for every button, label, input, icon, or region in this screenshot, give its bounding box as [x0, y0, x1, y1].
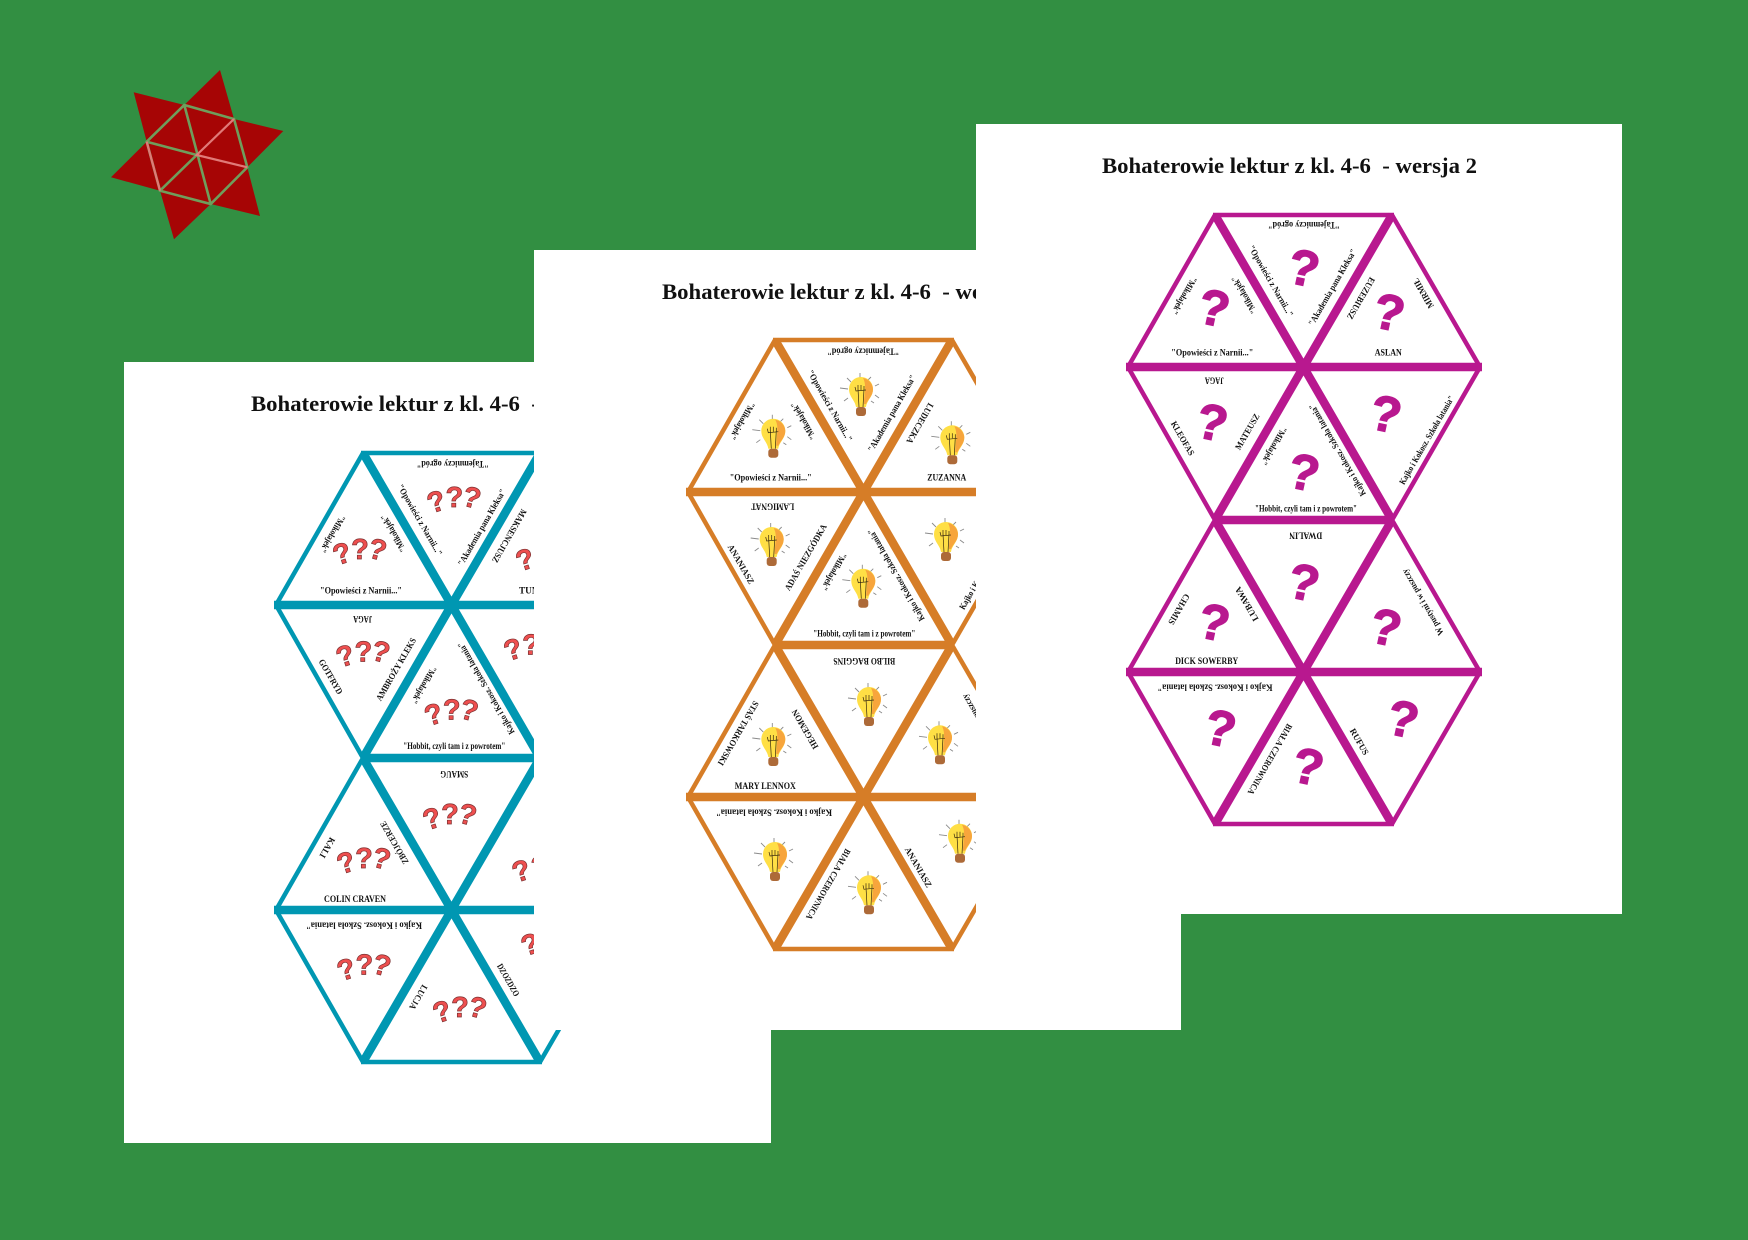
icons: triple question marks: ? — [351, 534, 369, 566]
triangle labels: "Opowieści z Narnii..." — [730, 473, 812, 483]
puzzle: teal — [251, 391, 630, 1062]
icons: triple question marks: ? — [517, 927, 544, 963]
triangle labels: "Hobbit, czyli tam i z powrotem" — [1255, 503, 1357, 513]
icons: magenta question marks: ? — [1193, 592, 1235, 653]
icons: magenta question marks: ? — [1191, 392, 1233, 453]
icons: triple question marks: ? — [368, 635, 393, 670]
triangle labels: DWALIN — [1289, 531, 1322, 541]
triangle labels: BIAŁA CZEROWNICA — [1245, 722, 1294, 797]
icons: triple question marks: ? — [548, 539, 573, 574]
triangle labels: AMBROŻY KLEKS — [374, 636, 418, 703]
icons: triple question marks: ? — [369, 842, 394, 877]
triangle labels: ASLAN — [1375, 347, 1402, 357]
icons: triple question marks: ? — [508, 854, 535, 890]
triangle labels: "Mikołajek" — [1259, 425, 1289, 467]
icons: magenta question marks: ? — [1200, 698, 1241, 759]
triangle labels: "Mikołajek" — [318, 513, 348, 555]
puzzle: orange — [662, 279, 1042, 949]
icons: triple question marks: ? — [329, 536, 356, 572]
panel: sheet version 2 with magenta question marks — [976, 124, 1622, 914]
triangle labels: KALI — [317, 836, 337, 860]
heading: Bohaterowie lektur z kl. 4-6 - wersja 3 — [662, 279, 1037, 304]
triangle labels: BILBO BAGGINS — [833, 656, 895, 666]
icons: triple question marks: ? — [553, 923, 578, 959]
triangle labels: COLIN CRAVEN — [324, 894, 386, 904]
triangle labels — [715, 347, 1016, 922]
triangle labels: Kajko i Kokosz. Szkoła latania" — [1158, 683, 1272, 693]
icons: triple question marks: ? — [365, 533, 390, 568]
icons: triple question marks: ? — [522, 630, 540, 662]
sheet background — [124, 362, 771, 1143]
icons: triple question marks: ? — [369, 948, 394, 984]
triangle labels: DICK SOWERBY — [1175, 656, 1239, 666]
triangle labels: LUDECZKA — [904, 401, 936, 446]
triangle labels — [306, 459, 559, 1012]
icons: magenta question marks: ? — [1365, 597, 1407, 658]
icons: triple question marks: ? — [354, 636, 372, 668]
triangle labels: Kajko i Kokosz. Szkoła latania" — [957, 519, 1016, 611]
icons: triple question marks: ? — [459, 481, 484, 516]
triangle labels: "Mikołajek" — [1169, 275, 1199, 316]
triangle labels: W pustyni i w puszczy — [959, 692, 1006, 762]
triangle labels: Kajko i Kokosz. Szkoła latania" — [455, 640, 517, 736]
icons: triple question marks: ? — [455, 798, 480, 833]
icons: triple question marks: ? — [419, 801, 446, 837]
heading: Bohaterowie lektur z kl. 4-6 - wersja 2 — [1102, 153, 1477, 178]
icons: triple question marks: ? — [530, 851, 548, 883]
icons: triple question marks: ? — [441, 799, 459, 831]
icons: triple question marks: ? — [536, 628, 561, 664]
panel: sheet version with question marks (teal) — [124, 362, 771, 1143]
triangle labels: LUCJA — [407, 983, 429, 1012]
triangle grid — [274, 453, 630, 1062]
triangle labels: SMAUG — [440, 769, 468, 779]
triangle labels: "Opowieści z Narnii..." — [395, 482, 445, 558]
triangle labels: "Opowieści z Narnii..." — [1246, 243, 1296, 319]
triangle labels: "Akademia pana Kleksa" — [866, 373, 918, 453]
triangle labels: Kajko i Kokosz. Szkoła latania" — [306, 921, 422, 931]
icons: triple question marks: ? — [451, 992, 469, 1024]
icons: triple question marks: ? — [445, 482, 463, 514]
icons: triple question marks: ? — [456, 693, 482, 729]
icons: magenta question marks: ? — [1287, 736, 1329, 798]
triangle labels: Kajko i Kokosz. Szkoła latania" — [716, 808, 832, 818]
icons: magenta question marks — [1191, 238, 1424, 798]
triangle labels: "Opowieści z Narnii..." — [1171, 347, 1253, 357]
triangle labels: ADAŚ NIEZGÓDKA — [783, 522, 829, 592]
heading: Bohaterowie lektur z kl. 4-6 - wersja 1 — [251, 391, 626, 416]
triangle labels: "Akademia pana Kleksa" — [456, 487, 508, 567]
triangle labels: CHAMIS — [1166, 592, 1192, 627]
triangle labels: ZBÓJCERZE — [378, 819, 411, 866]
icons: triple question marks: ? — [355, 843, 373, 875]
triangle labels: LUBAWA — [1233, 585, 1261, 623]
icons: triple question marks: ? — [332, 639, 359, 675]
triangle labels: "Mikołajek" — [727, 400, 757, 442]
icons: triple question marks: ? — [544, 850, 569, 885]
triangle grid — [1126, 215, 1482, 824]
triangle labels: "Mikołajek" — [1229, 274, 1259, 316]
sheet background — [534, 250, 1181, 1030]
triangle labels: "Hobbit, czyli tam i z powrotem" — [403, 741, 505, 751]
triangle labels: "Mikołajek" — [409, 664, 439, 706]
triangle labels: DZOZDZO — [495, 962, 522, 998]
triangle labels: "Akademia pana Kleksa" — [1306, 247, 1358, 327]
triangle labels: "Tajemniczy ogród" — [417, 459, 489, 469]
triangle labels: Kajko i Kokosz. Szkoła latania" — [1397, 394, 1456, 486]
triangle labels: STAŚ TARKOWSKI — [715, 699, 761, 768]
icons: magenta question marks: ? — [1368, 282, 1410, 343]
triangle labels: Kajko i Kokosz. Szkoła latania" — [865, 527, 927, 623]
puzzle: magenta — [1102, 153, 1482, 824]
triangle labels: ANANIASZ — [726, 543, 756, 586]
icons: triple question marks: ? — [539, 925, 557, 957]
triangle labels: "Mikołajek" — [378, 513, 408, 554]
panel: sheet version with light bulbs (orange) — [534, 250, 1181, 1030]
icons: magenta question marks: ? — [1193, 278, 1235, 339]
triangle labels — [1158, 220, 1456, 797]
icons: triple question marks: ? — [355, 950, 373, 982]
icons: magenta question marks: ? — [1382, 689, 1424, 750]
icons: triple question marks: ? — [443, 695, 461, 727]
icons: magenta question marks: ? — [1283, 552, 1325, 613]
triangle labels: MAKSENCJUSZ — [490, 508, 529, 564]
icons: triple question marks: ? — [429, 994, 456, 1030]
triangle labels: W pustyni i w puszczy — [1399, 567, 1446, 637]
triangle labels: KLEOFAS — [1169, 419, 1197, 457]
icons: triple question marks: ? — [333, 952, 360, 988]
triangle labels: HEGEMON — [789, 707, 820, 751]
triangle labels: ZUZANNA — [927, 473, 967, 483]
sheet background — [976, 124, 1622, 914]
icons: triple question marks: ? — [421, 697, 447, 733]
icons: magenta question marks: ? — [1365, 384, 1407, 445]
icon: red star of triangles — [111, 70, 283, 239]
icons: magenta question marks: ? — [1283, 238, 1325, 299]
icons: triple question marks: ? — [534, 540, 552, 572]
triangle labels: GOTFRYD — [317, 657, 345, 696]
triangle labels: BIAŁA CZEROWNICA — [804, 847, 853, 922]
triangle labels: MARY LENNOX — [735, 781, 796, 791]
triangle labels: "Mikołajek" — [819, 551, 849, 592]
triangle labels: RUFUS — [1348, 727, 1371, 757]
icons: triple question marks: ? — [333, 845, 360, 881]
triangle labels: "Hobbit, czyli tam i z powrotem" — [813, 628, 915, 638]
triangle labels: MATEUSZ — [1233, 412, 1262, 452]
triangle labels: "Opowieści z Narnii..." — [805, 368, 855, 443]
triangle labels: "Tajemniczy ogród" — [827, 347, 899, 357]
triangle labels: "Mikołajek" — [788, 400, 818, 442]
icons: magenta question marks: ? — [1283, 442, 1325, 503]
triangle labels: EUZEBIUSZ — [1345, 275, 1377, 321]
triangle labels: JAGA — [1204, 376, 1224, 386]
triangle labels: Kajko i Kokosz. Szkoła latania" — [1307, 402, 1368, 498]
icons: triple question marks: ? — [512, 542, 539, 578]
triangle labels: TUMNUS — [519, 586, 559, 596]
icons: triple question marks — [329, 481, 578, 1030]
icons: triple question marks: ? — [423, 484, 450, 520]
triangle labels: LAMIGNAT — [751, 502, 794, 512]
icons: light bulbs — [751, 373, 978, 914]
triangle labels: MIRMIŁ — [1411, 277, 1436, 310]
triangle labels: "Opowieści z Narnii..." — [320, 586, 402, 596]
triangle labels: "Tajemniczy ogród" — [1268, 220, 1340, 230]
triangle grid — [686, 340, 1042, 949]
icons: triple question marks: ? — [500, 632, 527, 668]
triangle labels: JAGA — [353, 614, 372, 624]
icons: triple question marks: ? — [465, 991, 490, 1026]
triangle labels: ANANIASZ — [903, 845, 934, 889]
